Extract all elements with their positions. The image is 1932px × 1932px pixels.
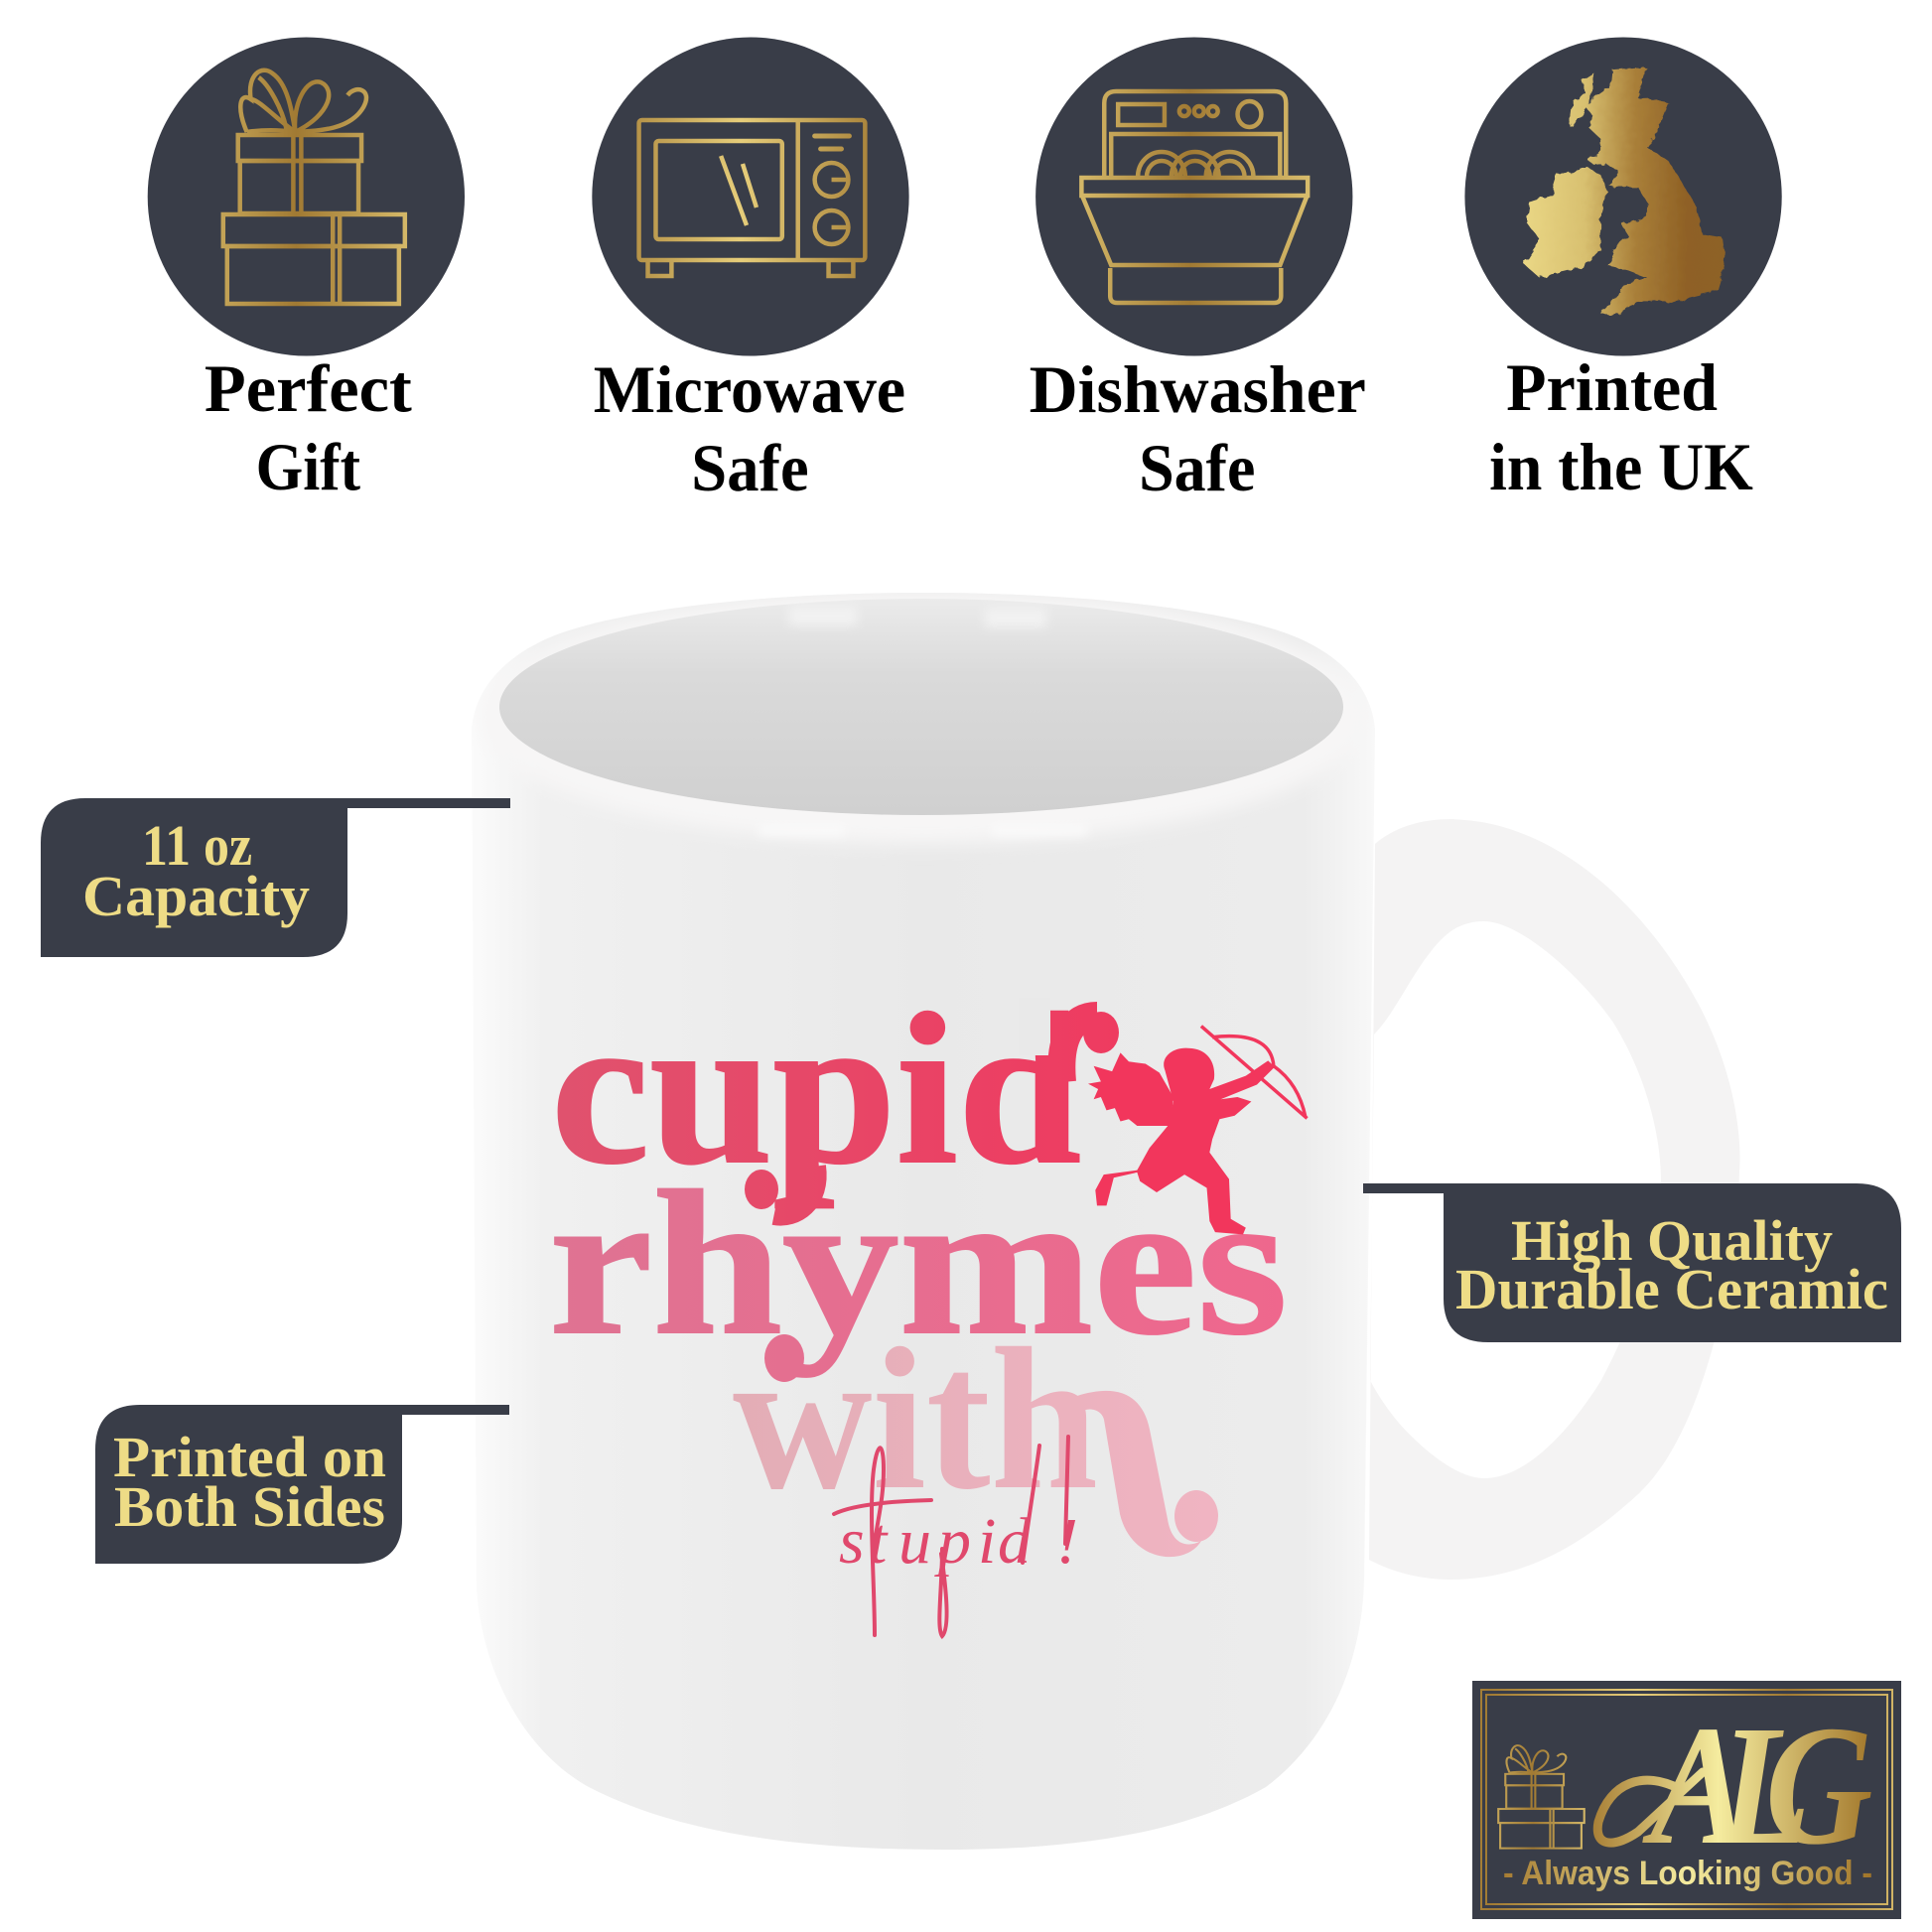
label: printed in the UK (1489, 350, 1753, 504)
callout: printed on both sides (95, 1405, 509, 1564)
label: microwave safe: Microwave (594, 352, 905, 427)
icon: microwave in circle (592, 38, 909, 355)
mug rim glow (600, 593, 1320, 842)
logo gift icon (1498, 1745, 1585, 1849)
artwork word: cupid: cupid (551, 970, 1081, 1209)
panel: microwave safe feature (592, 38, 909, 505)
mug handle (1369, 819, 1740, 1580)
label: perfect gift: Gift (256, 430, 360, 504)
panel: dishwasher safe feature (1030, 38, 1366, 505)
icon: gift boxes in circle (148, 38, 465, 355)
label: dishwasher safe: Safe (1139, 431, 1255, 505)
callout: printed on both sides: Both Sides (114, 1474, 385, 1539)
logo monogram: ALG (1642, 1690, 1872, 1879)
icon: cupid silhouette with bow (1088, 1027, 1308, 1234)
label: perfect gift (205, 351, 412, 504)
interior reflections (759, 606, 1087, 835)
logo tagline: - Always Looking Good - (1503, 1855, 1872, 1892)
callout: 11 oz capacity (41, 798, 510, 957)
label: printed in the UK: in the UK (1489, 430, 1753, 504)
mug interior (499, 599, 1343, 815)
icon: UK map in circle (1464, 38, 1782, 355)
mug artwork: cupid rhymes with stupid (549, 970, 1308, 1636)
label: dishwasher safe: Dishwasher (1030, 352, 1366, 427)
artwork word: stupid script: stupid! (839, 1505, 1078, 1578)
callout: 11 oz capacity: 11 oz (142, 813, 252, 878)
label: microwave safe: Safe (691, 431, 809, 505)
mug illustration (472, 590, 1740, 1850)
artwork word: rhymes: rhymes (549, 1149, 1288, 1377)
label: dishwasher safe (1030, 352, 1366, 505)
label: perfect gift: Perfect (205, 351, 412, 426)
callout: high quality durable ceramic (1363, 1183, 1901, 1342)
icon: dishwasher in circle (1035, 38, 1352, 355)
callout: 11 oz capacity: Capacity (82, 864, 310, 928)
callout: high quality durable ceramic: Durable Ceramic (1455, 1257, 1888, 1321)
label: printed in the UK: Printed (1506, 350, 1718, 425)
label: microwave safe (594, 352, 905, 505)
callout: high quality durable ceramic: High Quality (1511, 1208, 1833, 1273)
mug body (472, 593, 1375, 1850)
logo monogram swash (1597, 1772, 1703, 1843)
panel: printed in the UK feature (1464, 38, 1782, 504)
panel: perfect gift feature (148, 38, 465, 504)
artwork word: with: with (733, 1307, 1098, 1532)
logo: always looking good (1472, 1681, 1901, 1919)
artwork word: stupid script (834, 1437, 1078, 1636)
callout: printed on both sides: Printed on (113, 1425, 386, 1489)
